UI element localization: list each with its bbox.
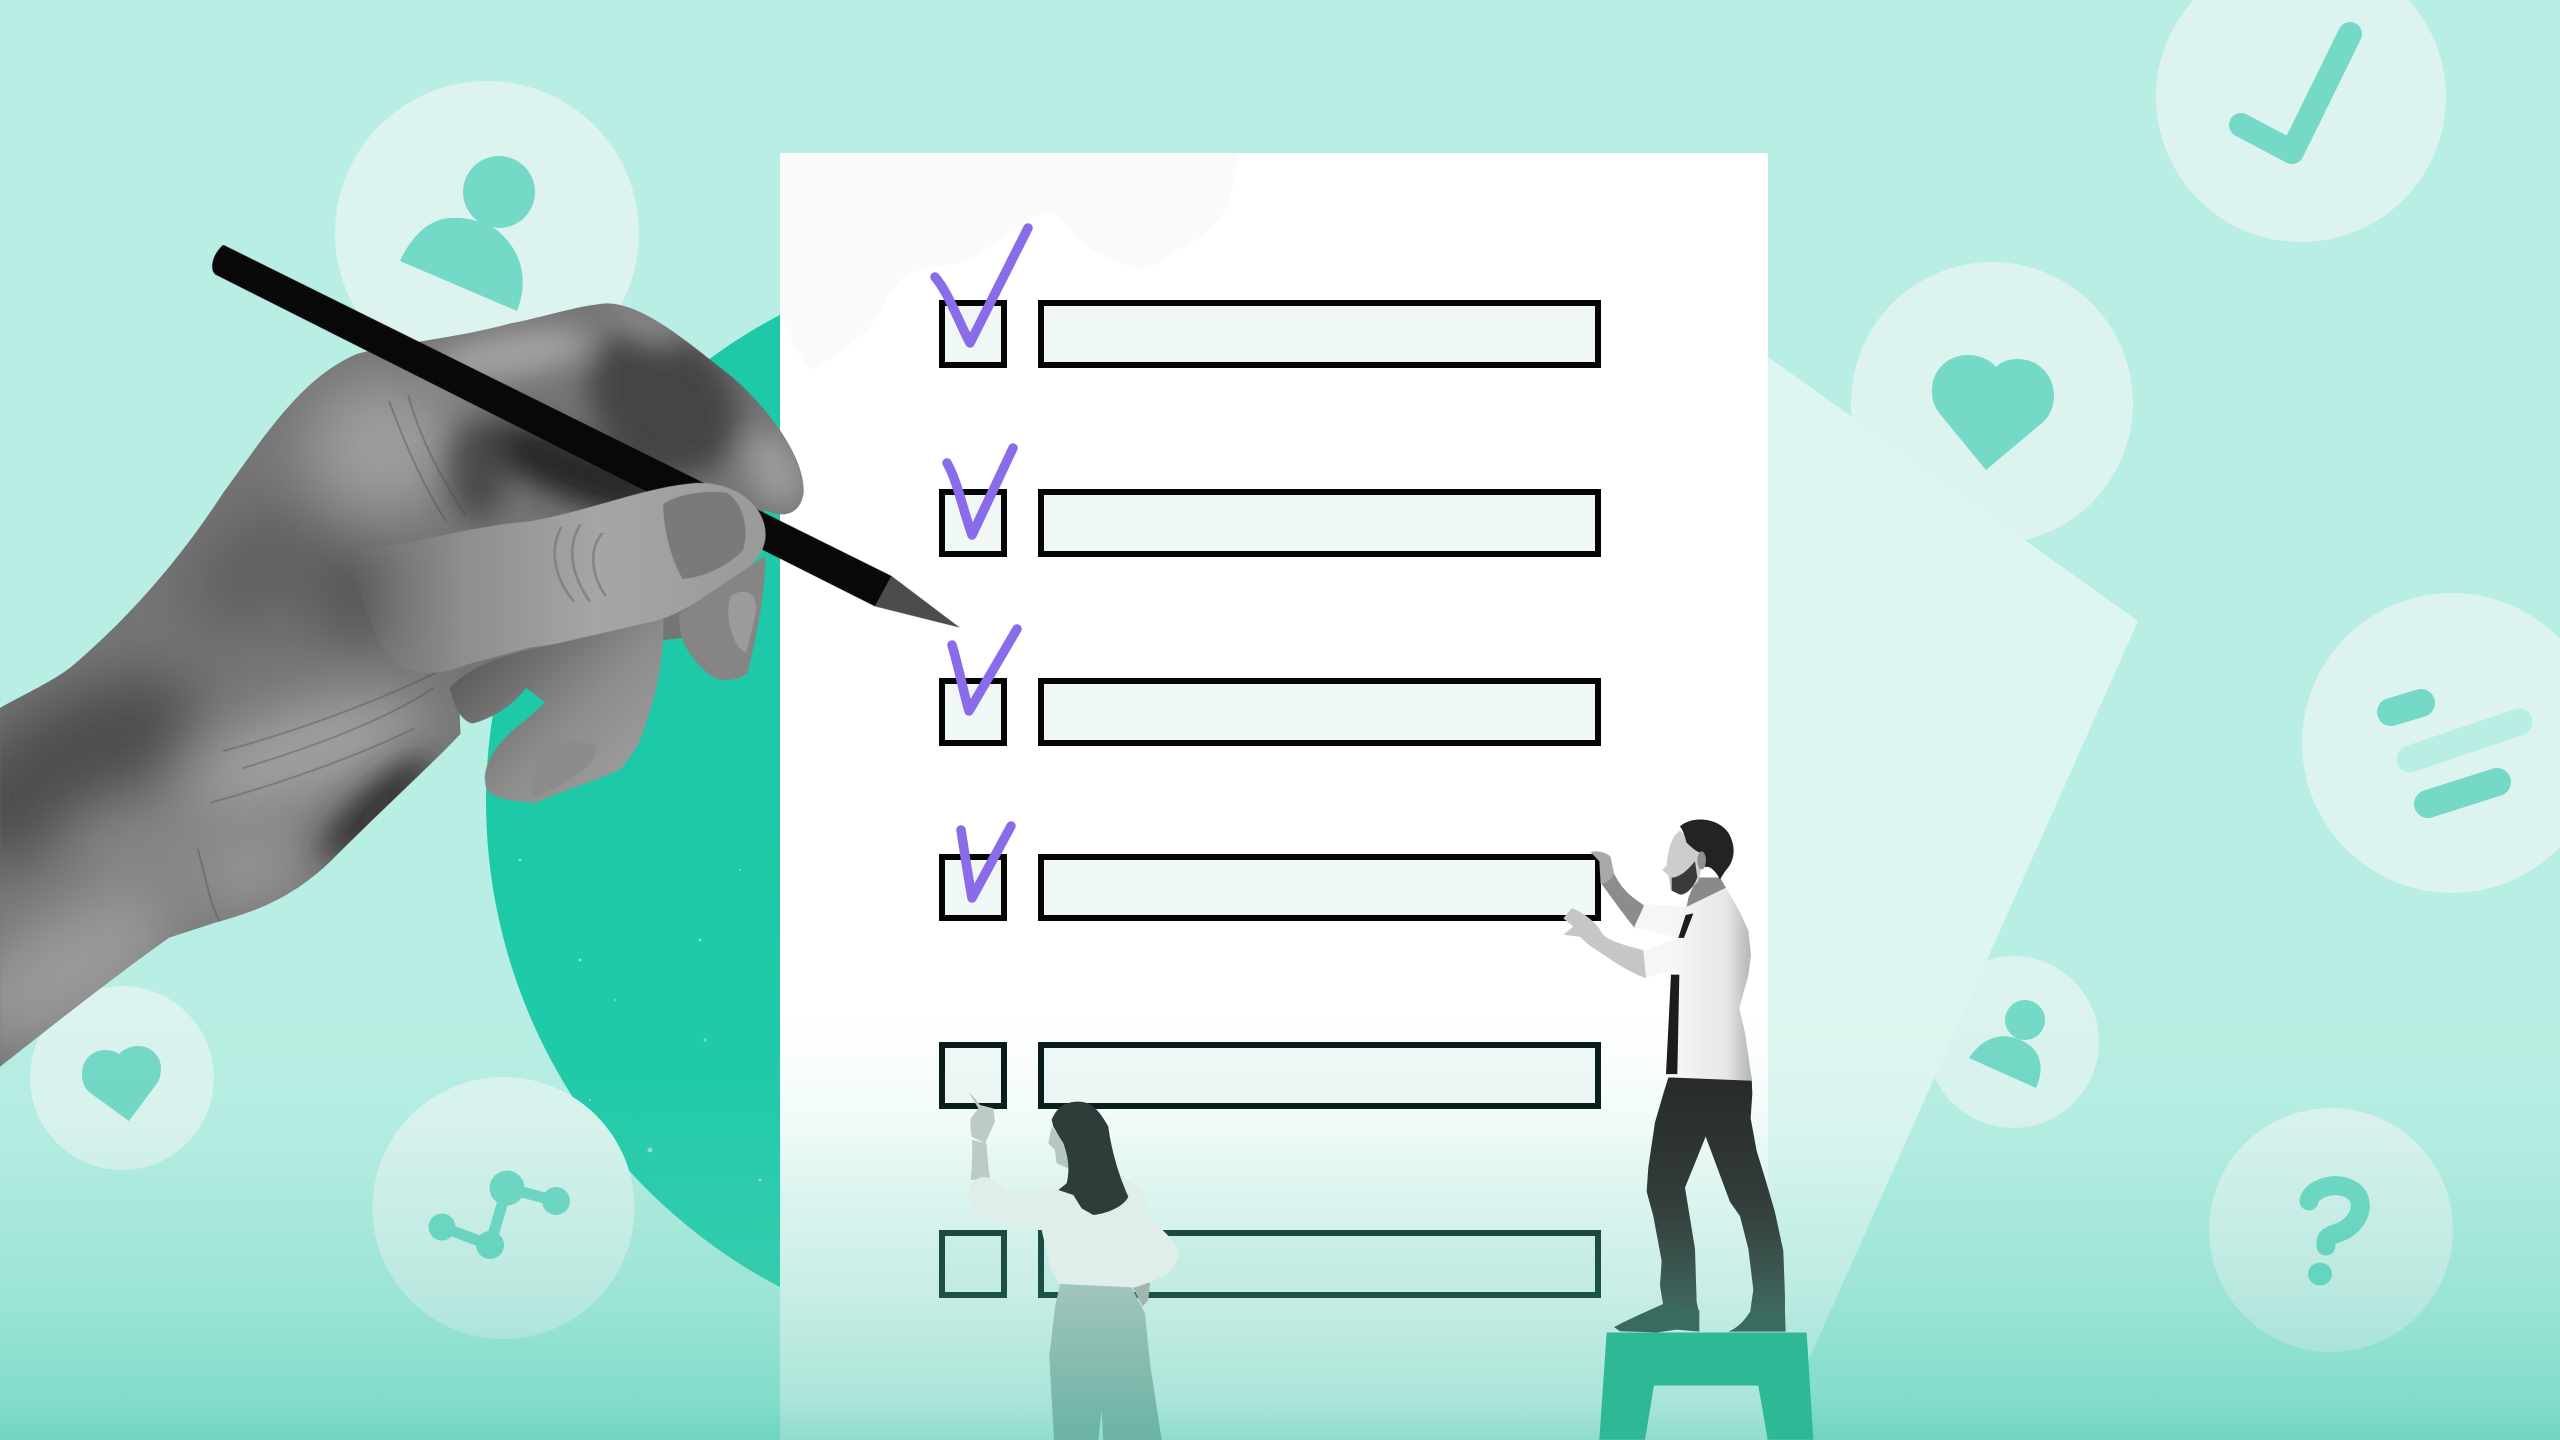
- checklist row 3: [942, 681, 1598, 743]
- stool: [1599, 1332, 1813, 1440]
- head: [1662, 820, 1734, 907]
- raised arm: [968, 1092, 995, 1180]
- icon circle: heart left: [30, 986, 214, 1170]
- icon circle: check mark: [2156, 0, 2446, 242]
- blouse: [969, 1177, 1179, 1287]
- man standing on stool: [1563, 820, 1786, 1332]
- icon circle: small user: [1927, 956, 2099, 1128]
- icon circle: heart top right: [1851, 262, 2133, 544]
- checklist row 1: [942, 303, 1598, 365]
- purple check 1: [935, 228, 1028, 343]
- hair: [1052, 1102, 1128, 1215]
- trousers: [1049, 1284, 1162, 1440]
- checklist row 2: [942, 492, 1598, 554]
- curled fingers: [450, 556, 765, 803]
- icon circle: graph nodes: [372, 1077, 634, 1339]
- hand holding pencil: [0, 245, 960, 1079]
- green circle behind the paper: [486, 252, 1584, 1350]
- checklist row 6: [942, 1233, 1598, 1295]
- checklist row 4: [942, 857, 1598, 918]
- shirt: [1634, 888, 1752, 1081]
- purple check 4: [961, 826, 1011, 898]
- face: [1048, 1127, 1068, 1168]
- back sheet of paper: [1768, 357, 2138, 1440]
- far arm: [1591, 851, 1644, 929]
- hand on hip: [1133, 1277, 1150, 1307]
- tie: [1666, 913, 1693, 1074]
- near arm and hand: [1563, 908, 1646, 978]
- checklist row 5: [942, 1045, 1598, 1106]
- pencil: [212, 245, 960, 628]
- purple check 2: [947, 448, 1013, 535]
- main paper sheet: [780, 153, 1768, 1440]
- purple check 3: [952, 629, 1017, 711]
- icon circle: user: [335, 81, 639, 385]
- icon circle: question mark: [2209, 1108, 2453, 1352]
- bottom colour fade: [0, 1000, 2560, 1440]
- thumb: [344, 483, 766, 673]
- woman pointing at checkbox: [968, 1092, 1179, 1440]
- shoes: [1614, 1304, 1786, 1332]
- trousers: [1647, 1077, 1785, 1314]
- icon circle: text lines: [2302, 593, 2560, 893]
